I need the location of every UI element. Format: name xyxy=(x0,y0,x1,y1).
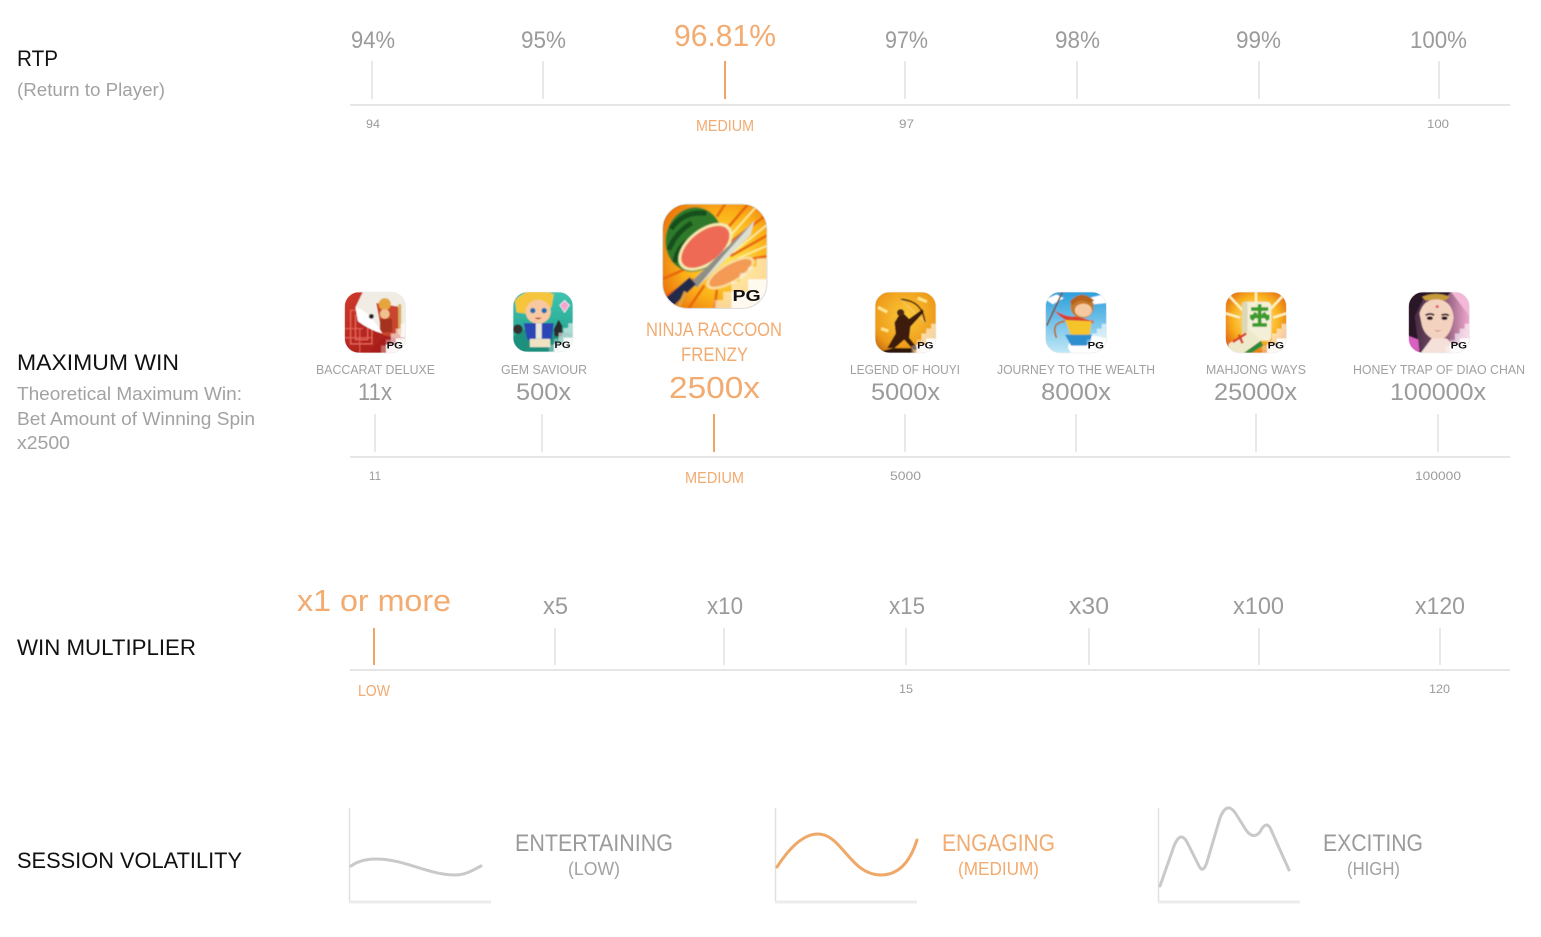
description: theoretical maximum win: Theoretical Maximum Win: xyxy=(17,384,242,404)
heading: Maximum Win: MAXIMUM WIN xyxy=(17,350,179,375)
game names and max win values: 500x xyxy=(516,379,571,406)
RTP scale values: 99% xyxy=(1236,27,1281,54)
multiplier scale values: x1 or more xyxy=(297,583,451,618)
game names and max win values: 8000x xyxy=(1041,379,1111,406)
icon: Gem Saviour: PG xyxy=(554,340,571,350)
multiplier scale values: x5 xyxy=(543,593,568,620)
panel: Maximum Win row xyxy=(17,202,1525,487)
icon: Baccarat Deluxe: PG xyxy=(387,341,403,351)
icon: Legend of Houyi: PG xyxy=(917,341,934,351)
game names and max win values: NINJA RACCOON xyxy=(646,320,782,341)
label: Entertaining (Low) xyxy=(515,830,673,879)
chart: low volatility curve xyxy=(349,808,491,902)
label: Entertaining (Low): (LOW) xyxy=(568,859,620,879)
icon: Honey Trap of Diao Chan xyxy=(1408,292,1470,353)
label: Exciting (High): (HIGH) xyxy=(1347,859,1400,879)
description: theoretical maximum win: x2500 xyxy=(17,433,70,453)
RTP axis labels: 100 xyxy=(1427,117,1449,131)
game names and max win values: GEM SAVIOUR xyxy=(501,362,587,377)
label: Engaging (Medium): (MEDIUM) xyxy=(958,859,1039,879)
chart: high volatility curve xyxy=(1158,808,1300,902)
heading: Win Multiplier: WIN MULTIPLIER xyxy=(17,635,196,660)
RTP scale values: 95% xyxy=(521,27,566,54)
icon: Baccarat Deluxe xyxy=(344,292,406,353)
icon: Legend of Houyi xyxy=(875,292,936,353)
RTP scale values xyxy=(351,18,1467,54)
multiplier axis and ticks xyxy=(350,628,1510,670)
RTP scale values: 94% xyxy=(351,27,395,54)
RTP axis labels: 97 xyxy=(899,117,914,131)
max win axis labels xyxy=(369,469,1461,487)
max win axis and ticks xyxy=(350,414,1510,457)
max win axis labels: 100000 xyxy=(1415,469,1461,483)
RTP axis labels xyxy=(366,117,1449,135)
multiplier scale values xyxy=(297,583,1465,620)
icon: Journey to the Wealth xyxy=(1045,292,1107,354)
label: Exciting (High): EXCITING xyxy=(1323,830,1423,857)
max win axis labels: 5000 xyxy=(890,469,921,483)
multiplier scale values: x120 xyxy=(1415,593,1465,620)
label: Engaging (Medium): ENGAGING xyxy=(942,830,1055,857)
game names and max win values: BACCARAT DELUXE xyxy=(316,362,435,377)
RTP scale values: 100% xyxy=(1410,27,1467,54)
RTP scale values: 96.81% xyxy=(674,18,776,53)
icon: Mahjong Ways: PG xyxy=(1268,341,1284,351)
multiplier scale values: x100 xyxy=(1233,593,1284,620)
label: Entertaining (Low): ENTERTAINING xyxy=(515,830,673,857)
multiplier axis labels: LOW xyxy=(358,683,391,700)
subheading: Return to Player: (Return to Player) xyxy=(17,80,165,100)
heading: RTP: RTP xyxy=(17,46,58,71)
label: Exciting (High) xyxy=(1323,830,1423,879)
icon: Gem Saviour xyxy=(513,290,573,352)
icon: Mahjong Ways xyxy=(1226,292,1286,353)
multiplier scale values: x15 xyxy=(889,593,925,620)
description: theoretical maximum win xyxy=(17,384,255,453)
game names and max win values: 11x xyxy=(358,379,392,406)
game names and max win values: 25000x xyxy=(1214,379,1297,406)
chart: medium volatility curve xyxy=(775,808,917,902)
panel: Win Multiplier row xyxy=(17,583,1510,700)
game names and max win values: HONEY TRAP OF DIAO CHAN xyxy=(1353,362,1525,377)
RTP axis labels: MEDIUM xyxy=(696,118,754,135)
icon: Ninja Raccoon Frenzy: PG xyxy=(733,288,761,305)
multiplier scale values: x30 xyxy=(1069,593,1109,620)
game names and max win values: FRENZY xyxy=(681,345,748,366)
multiplier axis labels: 15 xyxy=(899,682,913,696)
game names and max win values xyxy=(316,320,1525,406)
icon: Honey Trap of Diao Chan: PG xyxy=(1451,341,1467,351)
multiplier axis labels xyxy=(358,682,1450,700)
description: theoretical maximum win: Bet Amount of Winning Spin xyxy=(17,409,255,429)
RTP axis labels: 94 xyxy=(366,117,380,131)
multiplier scale values: x10 xyxy=(707,593,743,620)
max win axis labels: MEDIUM xyxy=(685,470,744,487)
label: Engaging (Medium) xyxy=(942,830,1055,879)
RTP scale values: 97% xyxy=(885,27,928,54)
game names and max win values: JOURNEY TO THE WEALTH xyxy=(997,362,1155,377)
heading: Session Volatility: SESSION VOLATILITY xyxy=(17,848,242,873)
game names and max win values: 2500x xyxy=(669,370,761,405)
game names and max win values: LEGEND OF HOUYI xyxy=(850,362,960,377)
RTP scale values: 98% xyxy=(1055,27,1100,54)
RTP axis and ticks xyxy=(350,61,1510,105)
icon: Journey to the Wealth: PG xyxy=(1088,341,1104,351)
game names and max win values: 5000x xyxy=(871,379,940,406)
max win axis labels: 11 xyxy=(369,469,381,483)
game names and max win values: MAHJONG WAYS xyxy=(1206,362,1306,377)
game names and max win values: 100000x xyxy=(1390,379,1486,406)
multiplier axis labels: 120 xyxy=(1429,682,1450,696)
panel: RTP row xyxy=(17,18,1510,135)
icon: Ninja Raccoon Frenzy xyxy=(660,202,767,308)
panel: Session Volatility row xyxy=(17,808,1423,902)
